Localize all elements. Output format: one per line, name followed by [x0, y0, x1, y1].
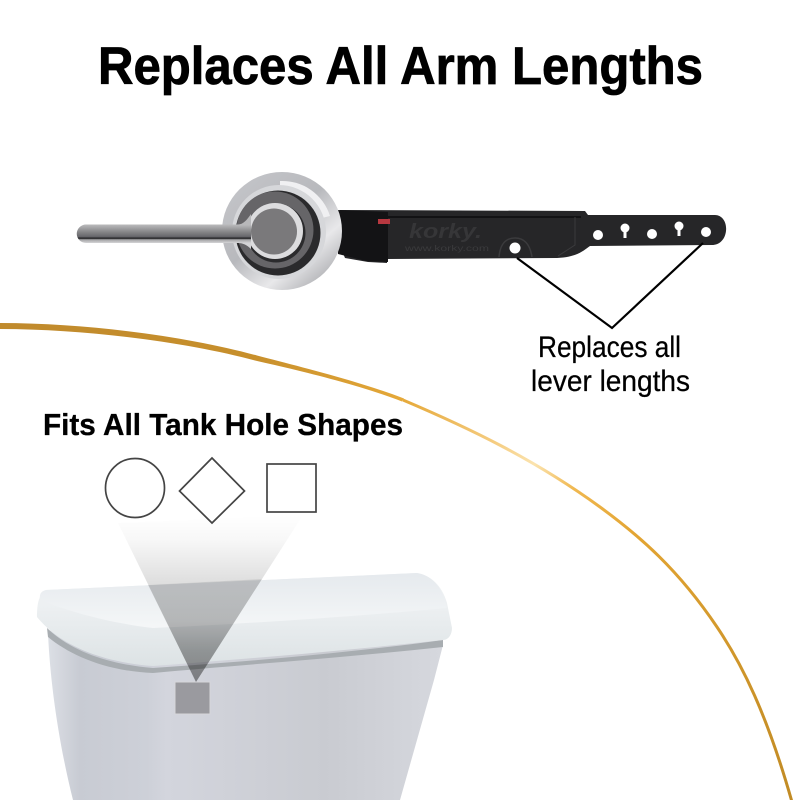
tank hole shapes: [106, 458, 316, 523]
icon: circle: [106, 458, 164, 518]
projection cone: [118, 515, 303, 682]
lever length caption: Replaces all: [538, 331, 681, 364]
korky web address: www.korky.com: [404, 243, 489, 253]
icon: square: [267, 464, 316, 512]
chrome escutcheon: [222, 172, 342, 290]
lever length caption: [531, 331, 690, 398]
icon: diamond: [180, 458, 244, 523]
chrome handle rod: [77, 214, 251, 249]
korky logo text: korky.: [409, 221, 482, 243]
title: Replaces All Arm Lengths: [98, 37, 703, 96]
lid top face: [40, 573, 447, 628]
toilet tank: [37, 573, 452, 800]
tank hole heading: Fits All Tank Hole Shapes: [43, 407, 403, 442]
connector lines: [517, 243, 703, 328]
lever length caption: lever lengths: [531, 365, 690, 398]
arm holes: [510, 222, 711, 254]
tank lid: [37, 573, 452, 666]
lever assembly: [77, 172, 726, 290]
gold arc divider: [0, 323, 792, 800]
tank body: [48, 630, 443, 800]
tank lever plate: [175, 682, 210, 714]
black plastic arm: [338, 210, 726, 263]
hub face: [251, 208, 297, 254]
lid shadow: [47, 628, 443, 673]
